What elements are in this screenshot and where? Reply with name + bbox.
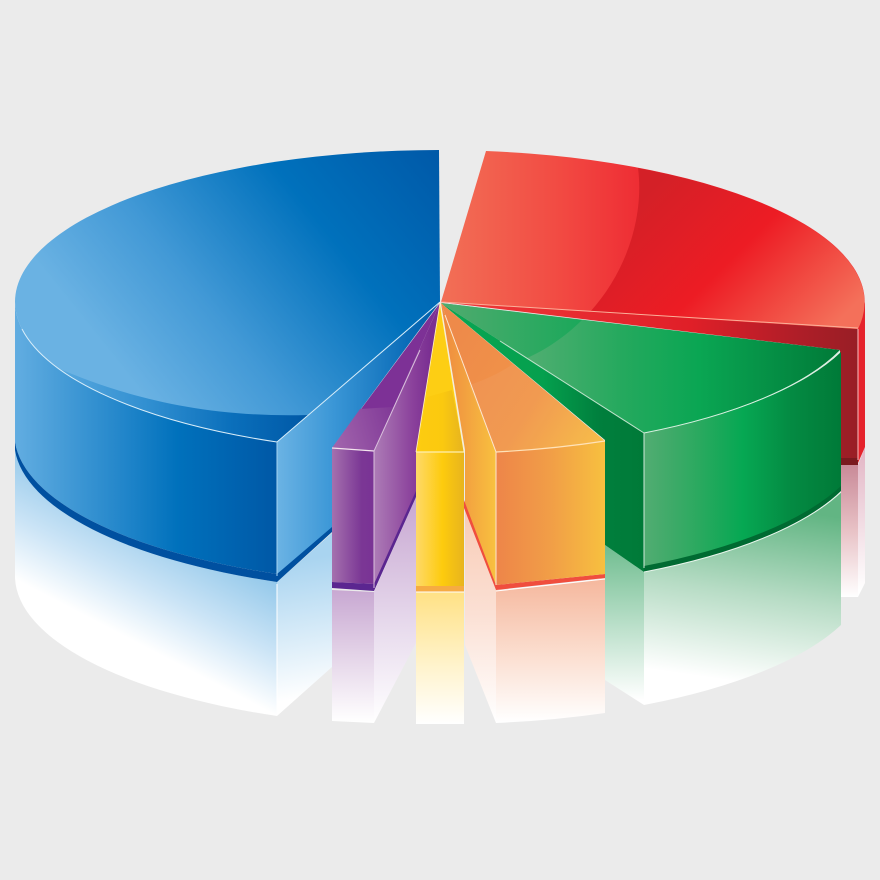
orange top lighter arc zone: [469, 364, 605, 452]
purple front face: [332, 448, 374, 584]
green slice: [441, 303, 841, 572]
blue top crescent: [55, 367, 308, 442]
orange slice: [441, 303, 605, 591]
red top: [441, 151, 865, 329]
yellow top: [416, 303, 464, 452]
green base rim: [644, 486, 841, 572]
green left face: [441, 303, 644, 572]
blue base rim: [15, 442, 332, 582]
reflection: orange slice: [465, 505, 605, 723]
blue outer side: [15, 302, 277, 574]
yellow top lower zone: [416, 390, 464, 452]
yellow slice: [416, 303, 464, 592]
orange red rim: [464, 500, 605, 590]
reflection: blue slice: [15, 447, 332, 716]
purple top apex: [332, 303, 440, 451]
purple base rim: [332, 491, 416, 591]
yellow front face: [416, 452, 464, 586]
red slice: [441, 151, 865, 465]
orange top: [441, 303, 605, 452]
blue top: [15, 150, 440, 442]
yellow base rim: [416, 586, 464, 592]
red base edge: [840, 458, 858, 465]
orange front face: [496, 441, 605, 585]
green top: [441, 303, 840, 433]
green top apex zone: [441, 303, 582, 358]
purple slice: [332, 303, 440, 591]
reflection: yellow slice: [416, 592, 464, 724]
purple right face: [374, 303, 440, 586]
orange left face: [441, 303, 496, 585]
reflection: purple slice: [332, 497, 416, 723]
reflection: red slice: [841, 447, 865, 597]
red top darker zone: [590, 168, 865, 329]
blue inner wall: [277, 302, 440, 578]
red inner wall: [441, 302, 858, 462]
reflection: green slice: [605, 492, 841, 705]
red outer side: [858, 302, 865, 463]
blue slice: [15, 150, 440, 582]
reflections on the floor: [15, 447, 865, 724]
green front face: [644, 352, 841, 568]
purple top lighter zone: [332, 407, 393, 451]
